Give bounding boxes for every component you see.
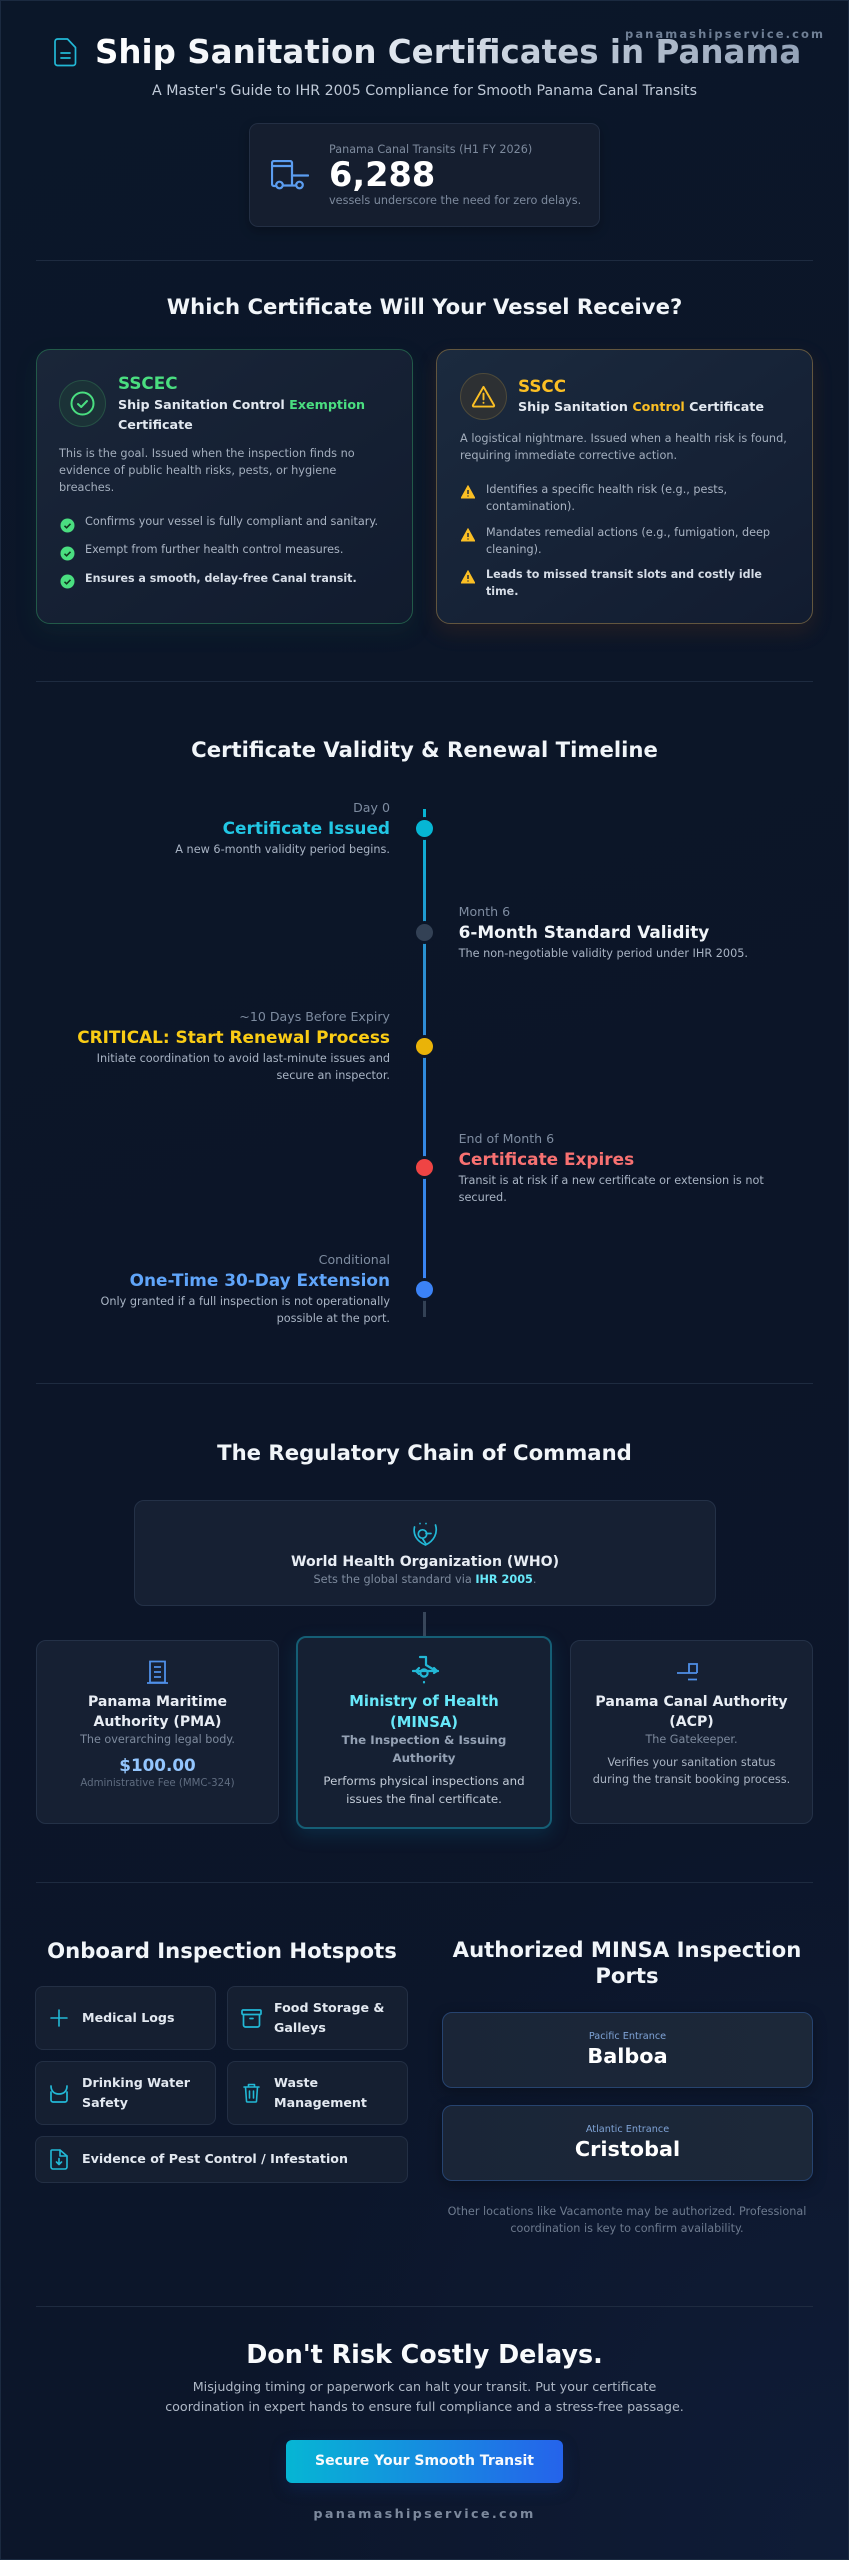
footer site name: panamashipservice.com [313,2507,536,2522]
PMA role: The overarching legal body. [80,1733,235,1746]
subtitle: A Master's Guide to IHR 2005 Compliance for Smooth Panama Canal Transits [152,83,697,99]
heading: which certificate: Which Certificate Will Your Vessel Receive? [167,294,682,319]
heading: timeline: Certificate Validity & Renewal Timeline [191,737,658,762]
icon: warning [461,570,475,584]
ACP description [593,1756,790,1786]
SSCEC description: breaches. [59,481,114,494]
heading: inspection ports: Authorized MINSA Inspection [453,1937,801,1962]
event: start renewal: secure an inspector. [276,1068,390,1082]
heading: inspection ports [452,1937,801,1988]
ports note [448,2205,806,2235]
ACP description: during the transit booking process. [593,1772,790,1786]
icon: MINSA [412,1656,439,1684]
SSCEC description: This is the goal. Issued when the inspection finds no [59,447,355,460]
hotspot: waste: Waste [274,2075,318,2090]
icon: check [60,518,74,532]
MINSA name: (MINSA) [390,1714,458,1730]
hotspot: food storage: Food Storage & [274,2000,384,2015]
heading: hotspots: Onboard Inspection Hotspots [47,1938,397,1963]
stat note: vessels underscore the need for zero delays. [329,194,581,207]
PMA fee: $100.00 [119,1755,196,1775]
SSCEC description [58,447,355,494]
PMA name: Panama Maritime [88,1694,227,1710]
MINSA name: Ministry of Health [349,1692,499,1710]
hotspot: pest control: Evidence of Pest Control / Infestation [82,2151,348,2166]
icon: check circle [59,380,106,427]
SSCC full name: Ship Sanitation Control Certificate [518,399,764,414]
header: title with icon [54,33,801,71]
WHO role: Sets the global standard via IHR 2005. [314,1573,536,1586]
SSCC consequences list: Leads to missed transit slots and costly idle [486,568,762,581]
panel: SSCC [436,349,813,624]
timeline [77,800,764,1324]
Balboa label: Pacific Entrance [589,2030,666,2042]
heading: inspection ports: Ports [595,1963,659,1988]
hotspot: drinking water: Safety [82,2095,128,2110]
MINSA description: issues the final certificate. [346,1792,502,1806]
SSCEC full name [118,397,365,432]
icon: archive [241,2009,262,2028]
event: certificate expires: Transit is at risk if a new certificate or extension is not [459,1174,764,1186]
icon: water basin [50,2085,68,2103]
panel: hotspots grid [35,1986,408,2183]
panel: MINSA [296,1636,552,1829]
timeline axis [423,809,426,1317]
marker: month 6 [413,920,436,944]
hotspot: medical logs: Medical Logs [82,2010,174,2025]
event: certificate issued: Certificate Issued [223,818,390,838]
button [286,2440,563,2483]
icon: file [50,2149,68,2170]
call to action heading: Don't Risk Costly Delays. [246,2339,603,2369]
SSCEC name: SSCEC [118,373,178,393]
stat label: Panama Canal Transits (H1 FY 2026) [329,143,532,156]
ports note: Other locations like Vacamonte may be authorized. Professional [448,2205,806,2218]
event: extension [100,1252,390,1324]
event: start renewal [77,1009,390,1082]
watermark: panamashipservice.com [625,27,825,41]
WHO name: World Health Organization (WHO) [291,1554,559,1570]
marker: expiry [413,1156,436,1178]
event: extension: Only granted if a full inspection is not operationally [100,1294,390,1308]
event: certificate expires: Certificate Expires [459,1149,634,1169]
event: start renewal: Initiate coordination to avoid last-minute issues and [97,1052,390,1064]
marker: issued [413,816,436,840]
event: standard validity: Month 6 [459,904,510,919]
panel: port Balboa [442,2012,813,2088]
title: Ship Sanitation Certificates in Panama [95,33,801,71]
call to action text: Misjudging timing or paperwork can halt your transit. Put your certificate [193,2379,656,2394]
event: extension: Conditional [319,1252,390,1267]
stat number: 6,288 [329,155,435,194]
hotspot: drinking water: Drinking Water [82,2075,190,2090]
Cristobal label: Atlantic Entrance [586,2124,669,2134]
SSCEC benefits list: Confirms your vessel is fully compliant and sanitary. [85,515,378,528]
MINSA role: Authority [392,1751,456,1765]
PMA name: Authority (PMA) [93,1714,222,1730]
event: extension: possible at the port. [277,1312,390,1324]
ports note: coordination is key to confirm availability. [510,2222,744,2235]
panel: port Cristobal [442,2105,813,2181]
SSCEC full name: Ship Sanitation Control Exemption [118,397,365,412]
hotspot: waste: Management [274,2095,367,2110]
hotspot: medical logs [35,1986,216,2050]
PMA name [88,1694,227,1730]
panel: WHO [134,1500,716,1606]
MINSA description: Performs physical inspections and [323,1774,525,1788]
call to action text [1,2377,848,2417]
event: certificate expires [458,1131,764,1204]
panel: ACP [570,1640,813,1824]
SSCC consequences list: Mandates remedial actions (e.g., fumigation, deep [486,526,770,538]
hotspot: food storage [227,1986,408,2050]
ACP description: Verifies your sanitation status [607,1756,776,1768]
hotspot: waste [227,2061,408,2125]
event: standard validity: 6-Month Standard Validity [459,922,709,942]
SSCEC full name: Certificate [118,417,193,432]
SSCC consequences list [461,483,770,598]
ACP name: (ACP) [669,1714,714,1730]
SSCC consequences list: Identifies a specific health risk (e.g., pests, [486,483,727,496]
MINSA role [342,1733,506,1765]
marker: renewal [413,1034,436,1058]
event: start renewal: CRITICAL: Start Renewal Process [77,1027,390,1047]
SSCEC benefits list [60,515,378,588]
panel: SSCEC [36,349,413,624]
SSCC consequences list: cleaning). [486,542,542,556]
icon: document [54,38,76,66]
SSCC description: A logistical nightmare. Issued when a health risk is found, [460,432,787,445]
SSCC description: requiring immediate corrective action. [460,449,677,462]
hotspot: drinking water [35,2061,216,2125]
ACP role: The Gatekeeper. [645,1733,738,1746]
icon: gate [677,1663,698,1680]
Balboa name: Balboa [587,2044,668,2068]
MINSA name [349,1692,499,1730]
icon: trash [243,2084,260,2103]
SSCEC benefits list: Exempt from further health control measures. [85,543,343,556]
panel: PMA [36,1640,279,1824]
MINSA role: The Inspection & Issuing [342,1733,506,1747]
button: Secure Your Smooth Transit [315,2453,534,2469]
SSCC consequences list: contamination). [486,500,575,513]
PMA fee note: Administrative Fee (MMC-324) [80,1778,235,1789]
icon: check [60,574,74,588]
event: start renewal: ~10 Days Before Expiry [239,1009,390,1024]
icon: warning [461,485,475,498]
event: standard validity: The non-negotiable validity period under IHR 2005. [459,946,748,960]
ACP name [595,1694,788,1730]
marker: extension [413,1278,436,1300]
event: certificate expires: End of Month 6 [459,1131,554,1146]
call to action text: coordination in expert hands to ensure full compliance and a stress-free passage. [165,2399,684,2414]
ACP name: Panama Canal Authority [595,1694,788,1710]
icon: warning circle [460,373,507,420]
MINSA description [323,1774,525,1806]
icon: truck [271,160,309,190]
icon: WHO [413,1522,438,1546]
icon: check [60,546,74,560]
event: certificate expires: secured. [459,1190,507,1204]
stat panel: canal transits [249,123,600,227]
Cristobal name: Cristobal [575,2137,680,2161]
SSCEC benefits list: Ensures a smooth, delay-free Canal transit. [85,572,357,585]
hotspot: pest control [35,2136,408,2183]
connector line [423,1612,426,1636]
heading: chain of command: The Regulatory Chain of Command [217,1440,632,1465]
SSCC description [460,432,787,462]
event: extension: One-Time 30-Day Extension [130,1270,390,1290]
SSCEC description: evidence of public health risks, pests, or hygiene [59,464,336,477]
SSCC consequences list: time. [486,585,518,598]
icon: warning [461,528,475,542]
event: certificate issued: Day 0 [353,800,390,815]
icon: building [147,1660,168,1684]
icon: plus [50,2009,68,2027]
event: certificate issued [175,800,390,856]
hotspot: food storage: Galleys [274,2020,326,2035]
event: standard validity [458,904,748,960]
SSCC name: SSCC [518,376,566,396]
event: certificate issued: A new 6-month validity period begins. [175,842,390,856]
